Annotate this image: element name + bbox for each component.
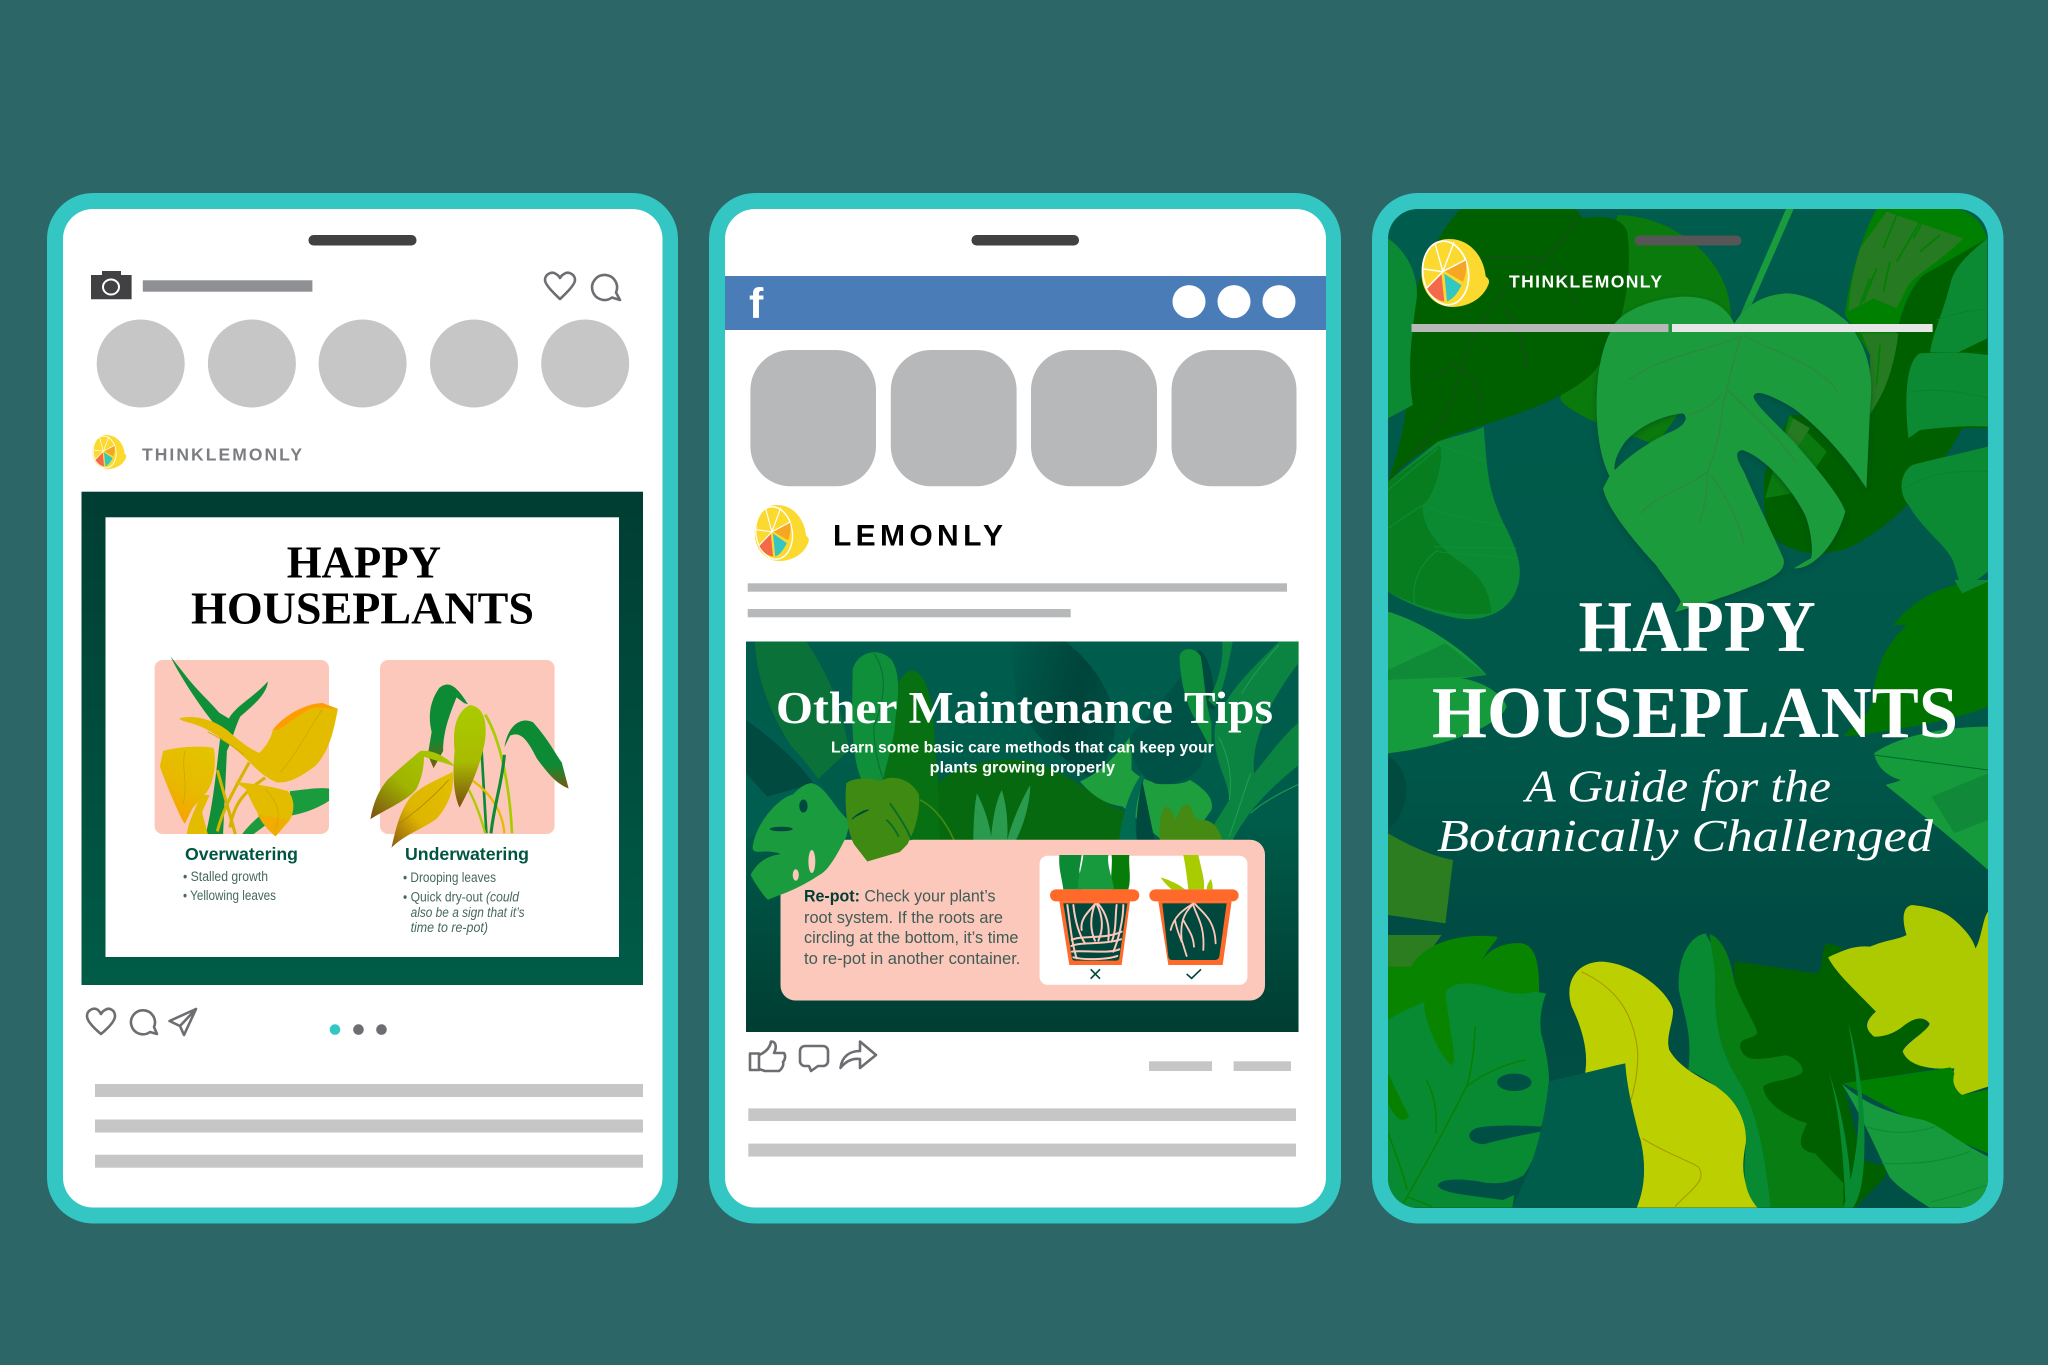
image subtitle: plants growing properly: [930, 759, 1115, 776]
image subtitle: Learn some basic care methods that can keep your: [831, 740, 1214, 756]
illustration: root-bound pot: [1050, 855, 1139, 979]
facebook header bar: [725, 276, 1326, 330]
foliage middle: [1388, 580, 1988, 880]
account name: THINKLEMONLY: [1509, 272, 1662, 292]
story title: HAPPY: [1578, 586, 1816, 667]
caption lines: [748, 1108, 1296, 1157]
label: underwatering: • Quick dry-out (could: [403, 889, 519, 904]
account name: LEMONLY: [833, 520, 1003, 553]
story screen: [1388, 209, 1988, 1208]
story title: [1433, 602, 1956, 738]
white pots card: [1040, 856, 1247, 985]
post image panel: [82, 492, 643, 985]
carousel dots: [330, 1024, 387, 1035]
story circles: [97, 320, 629, 408]
label: overwatering: [183, 844, 298, 903]
repot text: circling at the bottom, it’s time: [804, 928, 1018, 947]
story title: HOUSEPLANTS: [1432, 672, 1958, 753]
icon: camera: [91, 271, 132, 299]
foliage top: [1388, 209, 1988, 625]
icon: lemon logo: [91, 435, 126, 469]
icon: message bubble: [592, 275, 620, 300]
caption lines: [95, 1084, 643, 1168]
phone frame: [709, 193, 1341, 1224]
repot text: to re-pot in another container.: [804, 949, 1020, 968]
phone screen: [725, 209, 1326, 1208]
header bar: [143, 280, 312, 292]
repot text: [804, 887, 1020, 968]
speaker notch: [1634, 236, 1742, 246]
icon: facebook f: f: [749, 280, 764, 328]
label: underwatering: Underwatering: [405, 844, 529, 864]
pink box overwatering: [155, 660, 329, 834]
label: overwatering: • Stalled growth: [183, 869, 268, 884]
illustration: healthy pot: [1149, 855, 1239, 978]
white card: [106, 517, 619, 957]
icon: lemon logo: [752, 504, 809, 562]
phone frame: [47, 193, 678, 1224]
image subtitle: [831, 740, 1214, 776]
illustration: underwatered plant: [370, 685, 569, 848]
story progress bars: [1412, 324, 1933, 332]
label: overwatering: • Yellowing leaves: [183, 888, 276, 903]
panel: instagram phone: [47, 193, 678, 1224]
post text lines: [748, 583, 1287, 617]
label: underwatering: time to re-pot): [411, 920, 488, 935]
pink repot card: [780, 840, 1265, 1000]
speaker notch: [308, 235, 416, 246]
repot text: root system. If the roots are: [804, 908, 1003, 927]
phone screen: [63, 209, 662, 1208]
action icons: like, comment, share: [750, 1042, 876, 1071]
label: underwatering: • Drooping leaves: [403, 870, 496, 885]
illustration: overwatered plant: [160, 656, 338, 836]
label: overwatering: Overwatering: [185, 844, 298, 864]
story subtitle: Botanically Challenged: [1437, 811, 1934, 861]
post title: [191, 536, 534, 633]
post image: other maintenance tips: [746, 642, 1301, 1032]
pink box underwatering: [380, 660, 555, 834]
phone frame: [1372, 193, 2004, 1224]
action icons: heart, comment, share: [87, 1009, 196, 1035]
monstera leaves: [751, 778, 919, 900]
stat bars: [1149, 1061, 1291, 1071]
image title: Other Maintenance Tips: [776, 683, 1273, 733]
foliage background: [746, 642, 1301, 840]
story tiles: [750, 350, 1296, 486]
panel: facebook phone: [709, 193, 1341, 1224]
story subtitle: A Guide for the: [1522, 762, 1831, 812]
header circles: [1172, 285, 1296, 318]
label: underwatering: also be a sign that it’s: [411, 905, 525, 920]
icon: lemon logo: [1419, 238, 1489, 308]
story subtitle: [1437, 762, 1934, 861]
foliage bottom: [1388, 860, 1988, 1208]
panel: story phone: [1372, 193, 2004, 1224]
label: underwatering: [403, 844, 529, 935]
speaker notch: [972, 235, 1079, 246]
post title: HAPPY: [287, 536, 441, 587]
icon: heart: [545, 273, 575, 299]
repot text: Re-pot: Check your plant’s: [804, 887, 996, 906]
monstera leaf: [1597, 293, 1871, 612]
post title: HOUSEPLANTS: [191, 582, 534, 633]
foliage top right: [1764, 209, 1987, 553]
account name: THINKLEMONLY: [142, 445, 302, 465]
